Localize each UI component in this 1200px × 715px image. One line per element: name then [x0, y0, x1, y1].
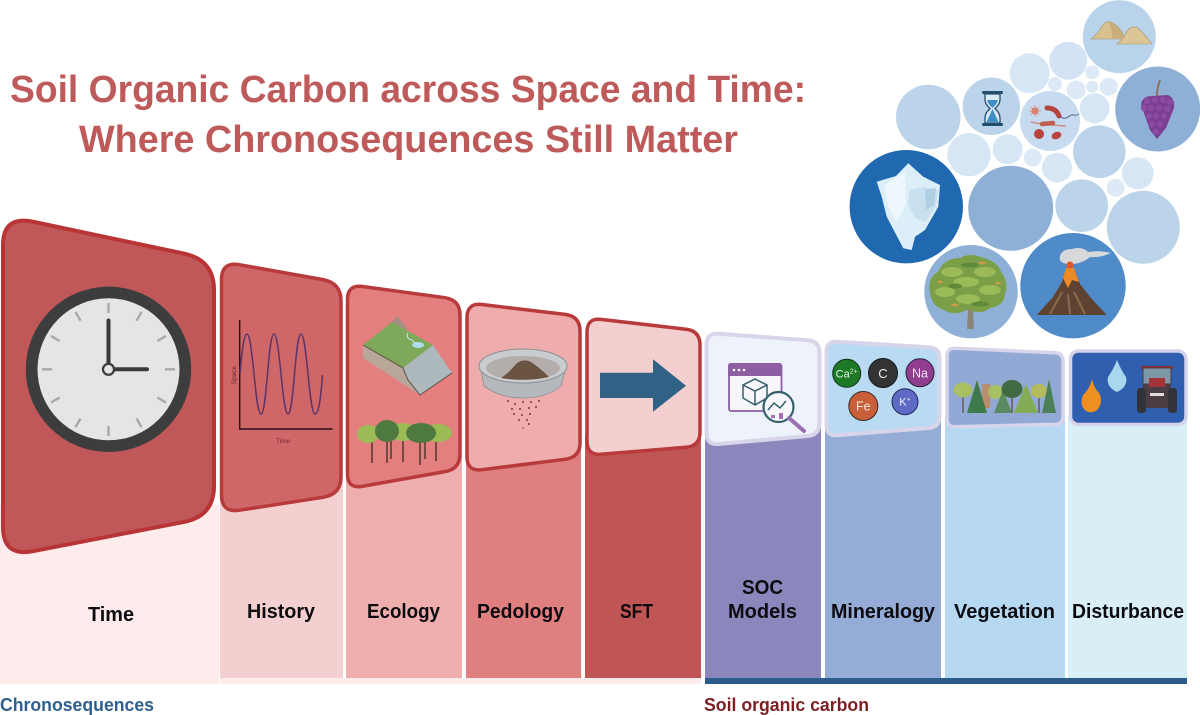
panel: Mineralogy card — [826, 342, 940, 435]
chart: sine wave: Space — [231, 365, 238, 384]
icon: mixed forest — [954, 379, 1056, 413]
icon: Ca ion: Ca — [836, 368, 850, 380]
base band: chronosequences — [220, 678, 701, 684]
icon: sand piles — [1083, 0, 1156, 73]
icon: iceberg — [850, 150, 963, 263]
icon: clock — [26, 287, 191, 452]
column: Disturbance: Disturbance — [1072, 601, 1184, 623]
column: Pedology — [466, 445, 581, 678]
icon: landscape block — [363, 316, 452, 395]
column: Ecology: Ecology — [367, 601, 441, 623]
icon: soil sieve — [479, 349, 567, 429]
column: SOC Models — [705, 425, 821, 678]
base bar: soil organic carbon — [705, 678, 1187, 684]
column: Time: Time — [88, 604, 134, 626]
column: SFT — [585, 435, 701, 678]
column: SOC Models: SOC — [742, 577, 783, 599]
panel: SFT card — [587, 319, 700, 454]
panel: Pedology card — [467, 304, 580, 470]
icon: K ion: K — [899, 396, 907, 408]
chart: sine wave: Time — [276, 438, 290, 445]
icon: water drop — [1108, 360, 1126, 392]
panel: Ecology card — [348, 286, 460, 487]
column: Disturbance — [1068, 415, 1187, 678]
column: Time — [0, 505, 219, 684]
column: Vegetation: Vegetation — [954, 601, 1055, 623]
chart: sine wave — [231, 320, 332, 445]
column: History: History — [247, 601, 316, 623]
label: Soil organic carbon: Soil organic carbon — [704, 695, 869, 715]
panel: Time card — [3, 221, 214, 552]
panel: History card — [222, 264, 341, 511]
title — [10, 69, 806, 161]
icon: Ca ion — [833, 359, 861, 387]
column: History — [220, 480, 343, 678]
title: Soil Organic Carbon across Space and Time: — [10, 69, 806, 111]
icon: Na ion: Na — [912, 366, 928, 380]
panel: Disturbance card — [1070, 351, 1186, 424]
icon: K ion — [892, 389, 918, 415]
column: Ecology — [346, 455, 462, 678]
icon: Fe ion: Fe — [856, 400, 871, 414]
icon: grapes — [1115, 66, 1200, 152]
icon: tree — [924, 245, 1018, 338]
title: Where Chronosequences Still Matter — [79, 119, 738, 161]
label: Chronosequences: Chronosequences — [0, 695, 154, 715]
column: Mineralogy — [825, 415, 941, 678]
icon: forest — [357, 420, 452, 465]
icon: microbes — [1020, 91, 1080, 151]
icon: hourglass — [963, 78, 1020, 135]
column: Pedology: Pedology — [477, 601, 565, 623]
bubble cluster — [896, 42, 1180, 264]
column: Vegetation — [945, 415, 1065, 678]
column: Mineralogy: Mineralogy — [831, 601, 936, 623]
panel: Vegetation card — [947, 348, 1063, 427]
icon: Ca ion: 2+ — [850, 368, 858, 376]
icon: C ion: C — [878, 366, 888, 381]
icon: tractor — [1137, 366, 1177, 413]
column: SOC Models: Models — [728, 601, 797, 623]
column: SFT: SFT — [620, 601, 653, 623]
icon: flame — [1082, 379, 1101, 412]
icon: K ion: + — [907, 396, 911, 404]
icon: arrow — [600, 359, 686, 412]
icon: model analysis — [728, 363, 804, 431]
panel: SOC Models card — [706, 334, 820, 444]
icon: volcano — [1020, 233, 1126, 338]
